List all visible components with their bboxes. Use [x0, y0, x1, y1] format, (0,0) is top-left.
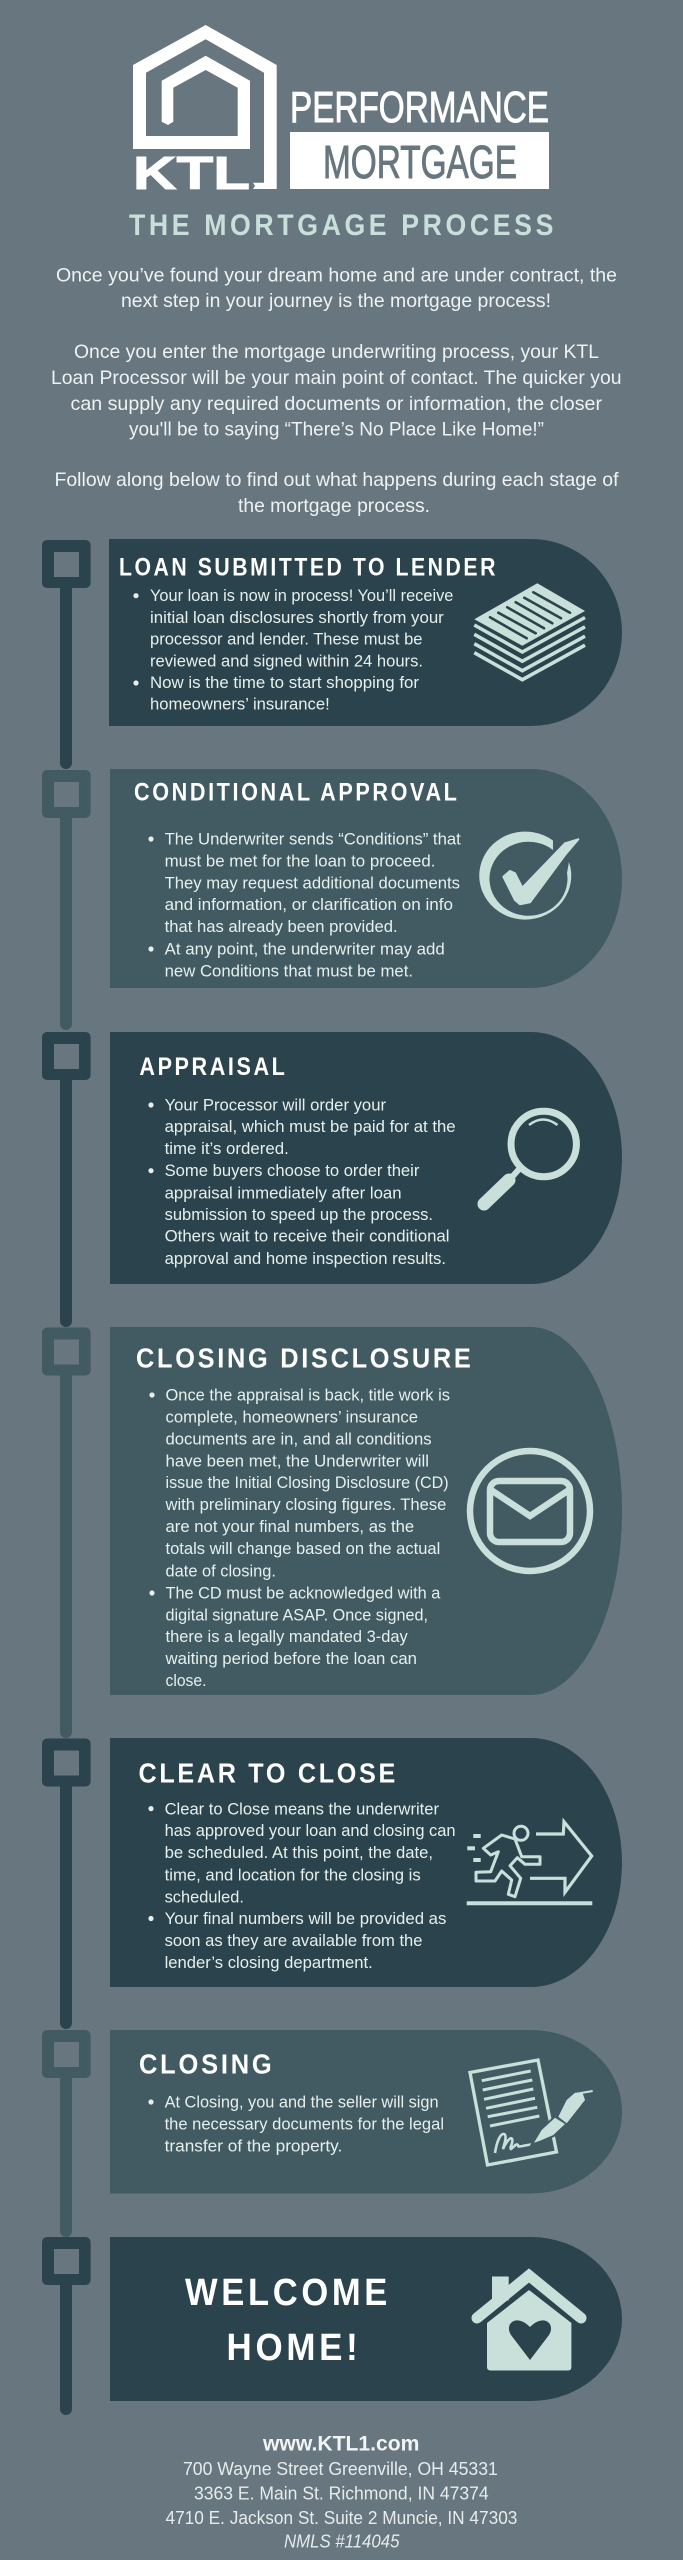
bullet list: clear to close: be scheduled. At this point, the date, — [165, 1844, 433, 1862]
bullet list: closing disclosure: are not your final numbers, as the — [166, 1518, 414, 1536]
bullet list: appraisal — [148, 1097, 456, 1268]
address lines: 3363 E. Main St. Richmond, IN 47374 — [194, 2483, 489, 2504]
bullet list: closing disclosure: totals will change based on the actual — [166, 1540, 440, 1558]
bullet list: loan submitted: processor and lender. These must be — [150, 630, 422, 648]
timeline node 3 — [42, 1032, 91, 1080]
bullet list: loan submitted: homeowners’ insurance! — [150, 696, 330, 714]
bullet list: closing disclosure: complete, homeowners’ insurance — [166, 1409, 418, 1427]
bullet list: loan submitted: initial loan disclosures shortly from your — [150, 609, 444, 627]
NMLS number: NMLS #114045 — [284, 2530, 400, 2552]
timeline connector 4 — [60, 1368, 72, 1738]
footer: contact details — [166, 2432, 517, 2552]
bullet list: appraisal: appraisal immediately after loan — [165, 1184, 402, 1202]
bullet list: loan submitted: reviewed and signed within 24 hours. — [150, 652, 423, 670]
intro text block: you'll be to saying “There’s No Place Like Home!” — [129, 418, 544, 440]
icon: house with heart — [477, 2276, 581, 2370]
bullet list: appraisal: time it’s ordered. — [165, 1140, 289, 1158]
timeline node 4 — [42, 1328, 91, 1376]
bullet list: clear to close: lender’s closing department. — [165, 1954, 373, 1972]
icon: stack of papers — [474, 583, 585, 680]
heading: conditional approval: CONDITIONAL APPROVAL — [134, 779, 460, 807]
panel: clear to close — [110, 1738, 622, 1987]
bullet list: appraisal: Your Processor will order your — [165, 1097, 387, 1115]
bullet list: appraisal: appraisal, which must be paid for at the — [165, 1118, 456, 1136]
icon: brush check mark in circle — [479, 832, 578, 920]
panel: closing — [110, 2030, 622, 2194]
timeline node 2 — [42, 770, 91, 818]
bullet list: closing: transfer of the property. — [165, 2138, 342, 2156]
bullet list: closing disclosure: Once the appraisal is back, title work is — [166, 1387, 450, 1405]
timeline node 1 — [42, 540, 91, 588]
bullet list: closing disclosure — [149, 1387, 450, 1690]
address lines: 4710 E. Jackson St. Suite 2 Muncie, IN 47303 — [166, 2507, 517, 2528]
bullet list: closing disclosure: close. — [166, 1672, 206, 1690]
title: THE MORTGAGE PROCESS — [129, 209, 557, 242]
icon: signed document and pen — [470, 2060, 593, 2165]
bullet list: closing disclosure: documents are in, and all conditions — [166, 1430, 432, 1448]
bullet list: clear to close: soon as they are available from the — [165, 1932, 422, 1950]
timeline node 6 — [42, 2030, 91, 2078]
bullet list: conditional approval: must be met for the loan to proceed. — [165, 852, 436, 870]
bullet list: appraisal: submission to speed up the process. — [165, 1206, 433, 1224]
timeline connector 6 — [60, 2070, 72, 2237]
bullet list: closing disclosure: date of closing. — [166, 1562, 276, 1580]
bullet list: closing: the necessary documents for the legal — [165, 2116, 444, 2134]
heading: closing: CLOSING — [139, 2048, 274, 2079]
bullet list: clear to close: scheduled. — [165, 1888, 244, 1906]
bullet list: closing disclosure: digital signature ASAP. Once signed, — [166, 1607, 428, 1625]
bullet list: loan submitted: Your loan is now in process! You’ll receive — [150, 587, 453, 605]
bullet list: clear to close: Your final numbers will be provided as — [165, 1910, 446, 1928]
timeline connector 3 — [60, 1072, 72, 1327]
bullet list: appraisal: Others wait to receive their conditional — [165, 1228, 450, 1246]
bullet list: clear to close: Clear to Close means the underwriter — [165, 1800, 439, 1818]
timeline node 5 — [42, 1738, 91, 1786]
heading: closing disclosure: CLOSING DISCLOSURE — [136, 1343, 474, 1374]
address lines: 700 Wayne Street Greenville, OH 45331 — [183, 2458, 498, 2479]
panel: welcome home — [110, 2237, 622, 2401]
bullet list: clear to close: time, and location for the closing is — [165, 1866, 421, 1884]
bullet list: conditional approval: They may request additional documents — [165, 874, 460, 892]
timeline connector 5 — [60, 1780, 72, 2029]
bullet list: closing disclosure: there is a legally mandated 3-day — [166, 1628, 408, 1646]
website link: www.KTL1.com — [262, 2432, 419, 2455]
intro text block — [51, 265, 622, 517]
heading: welcome home: HOME! — [226, 2326, 362, 2368]
panel: appraisal — [110, 1032, 622, 1284]
intro text block: can supply any required documents or information, the closer — [70, 393, 602, 415]
bullet list: appraisal: Some buyers choose to order their — [165, 1162, 420, 1180]
bullet list: conditional approval — [148, 830, 461, 980]
bullet list: closing disclosure: waiting period before the loan can — [164, 1650, 417, 1668]
panel: closing disclosure — [110, 1327, 622, 1695]
bullet list: conditional approval: that has already been provided. — [165, 918, 398, 936]
heading: appraisal: APPRAISAL — [139, 1053, 287, 1081]
bullet list: clear to close: has approved your loan and closing can — [165, 1822, 456, 1840]
timeline connector 2 — [60, 810, 72, 1030]
heading: loan submitted to lender: LOAN SUBMITTED TO LENDER — [119, 554, 498, 582]
bullet list: conditional approval: The Underwriter sends “Conditions” that — [165, 830, 461, 848]
heading: clear to close: CLEAR TO CLOSE — [138, 1757, 398, 1788]
logo: KTL Performance Mortgage — [133, 25, 549, 199]
bullet list: closing — [148, 2094, 444, 2156]
icon: magnifying glass — [484, 1111, 576, 1204]
bullet list: closing disclosure: issue the Initial Closing Disclosure (CD) — [166, 1474, 449, 1492]
timeline connector 1 — [60, 580, 72, 769]
bullet list: clear to close — [148, 1800, 456, 1972]
panel: conditional approval — [110, 769, 622, 988]
logo MORTGAGE wordmark: MORTGAGE — [323, 136, 517, 188]
logo KTL letters: KTL — [133, 147, 250, 199]
bullet list: conditional approval: At any point, the underwriter may add — [165, 940, 445, 958]
bullet list: closing disclosure: with preliminary closing figures. These — [164, 1496, 446, 1514]
heading: welcome home: WELCOME — [185, 2271, 391, 2313]
heading: welcome home — [185, 2271, 391, 2368]
bullet list: closing disclosure: The CD must be acknowledged with a — [166, 1584, 441, 1602]
intro text block: Follow along below to find out what happens during each stage of — [54, 469, 619, 491]
icon: envelope in circle — [470, 1451, 590, 1571]
bullet list: closing: At Closing, you and the seller will sign — [165, 2094, 439, 2112]
bullet list: loan submitted — [133, 587, 453, 714]
bullet list: conditional approval: and information, or clarification on info — [165, 896, 453, 914]
intro text block: Once you’ve found your dream home and are under contract, the — [56, 265, 617, 287]
bullet list: appraisal: approval and home inspection results. — [165, 1250, 446, 1268]
bullet list: closing disclosure: have been met, the Underwriter will — [166, 1452, 429, 1470]
bullet list: loan submitted: Now is the time to start shopping for — [150, 674, 420, 692]
panel: loan submitted to lender — [109, 539, 622, 726]
timeline node 7 — [42, 2237, 91, 2285]
intro text block: next step in your journey is the mortgage process! — [121, 290, 551, 312]
logo house mark — [133, 25, 277, 189]
logo PERFORMANCE wordmark: PERFORMANCE — [290, 83, 549, 132]
intro text block: Once you enter the mortgage underwriting process, your KTL — [74, 341, 599, 363]
address lines — [166, 2458, 517, 2528]
timeline connector 7 — [60, 2278, 72, 2415]
logo MORTGAGE box — [290, 132, 549, 189]
icon: person running to arrow — [467, 1822, 592, 1903]
intro text block: Loan Processor will be your main point of contact. The quicker you — [51, 367, 622, 389]
intro text block: the mortgage process. — [238, 495, 430, 517]
bullet list: conditional approval: new Conditions that must be met. — [165, 962, 413, 980]
